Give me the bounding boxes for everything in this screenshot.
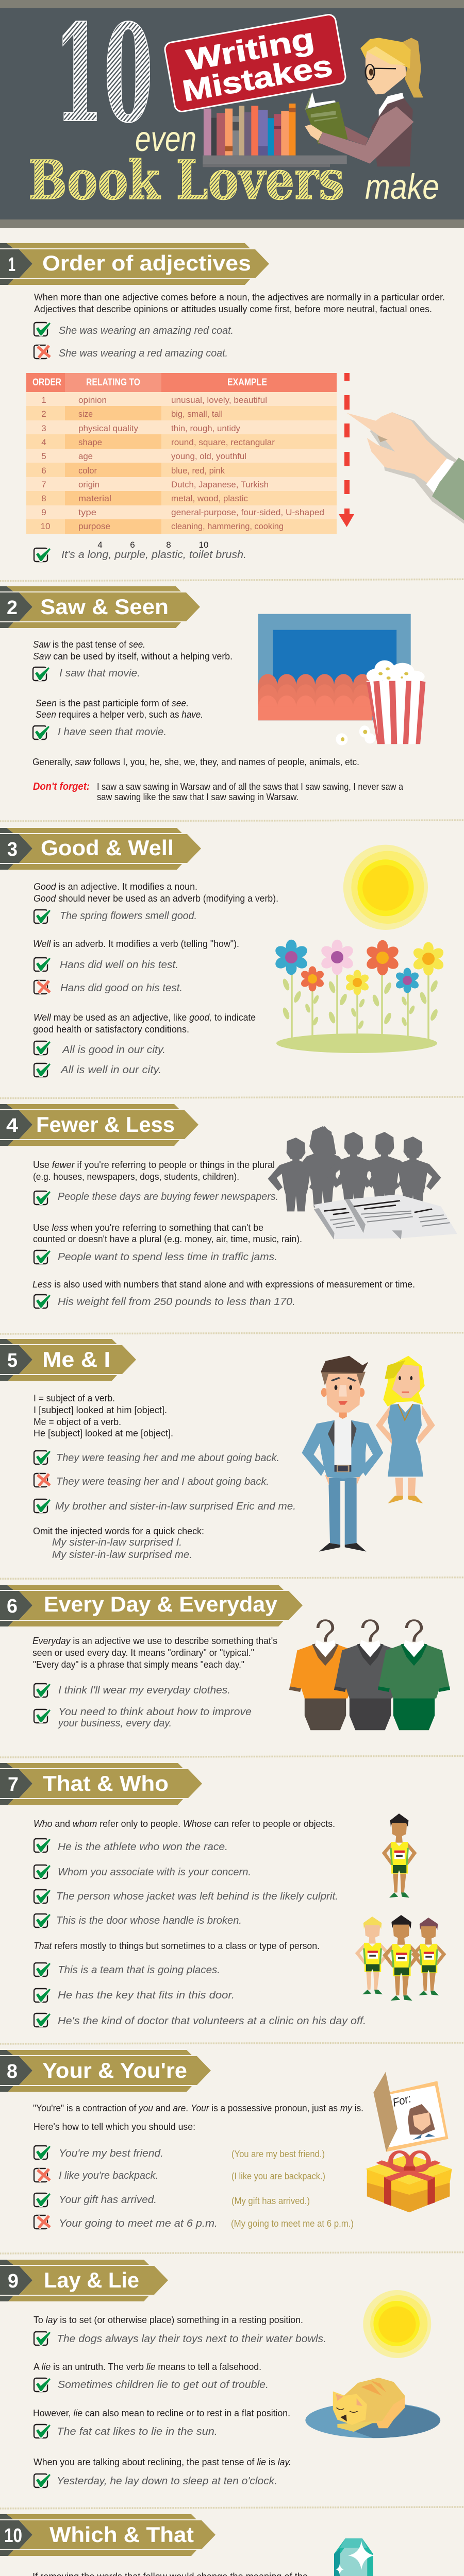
banner 10: Which & That [49, 2522, 194, 2547]
banner 5: 5 [7, 1350, 18, 1371]
text: less: Use less when you're referring to something that can't be [33, 1223, 263, 1233]
correct example [34, 1249, 277, 1264]
incorrect example [34, 2168, 325, 2182]
banner 6 [0, 1585, 303, 1626]
adjective order table: 6 [41, 466, 46, 476]
text: lie: A lie is an untruth. The verb lie means to tell a falsehood. [34, 2362, 261, 2372]
correct example [34, 1889, 338, 1904]
correct example [34, 1190, 278, 1205]
correct example [34, 1706, 252, 1729]
correct example: I think I'll wear my everyday clothes. [58, 1685, 230, 1696]
correct example: My brother and sister-in-law surprised Eric and me. [55, 1501, 296, 1512]
illustration: athlete team [355, 1915, 446, 2001]
correct example: (You are my best friend.) [231, 2149, 325, 2159]
illustration: jackets on hangers [289, 1620, 450, 1730]
illustration: sleeping cat [305, 2378, 440, 2438]
correct example: You need to think about how to improve [58, 1706, 252, 1718]
adjective order table: general-purpose, four-sided, U-shaped [171, 507, 324, 517]
text: well as adjective: good health or satisfactory conditions. [33, 1024, 189, 1035]
red sign: Writing Mistakes [164, 13, 346, 113]
text: lie recline: However, lie can also mean to recline or to rest in a flat position. [33, 2408, 290, 2418]
correct example: All is well in our city. [60, 1064, 161, 1076]
illustration: gift tag: For: [391, 2092, 412, 2109]
order numbers above example: 8 [166, 540, 171, 550]
banner 1 [0, 243, 269, 285]
adjective order table: round, square, rectangular [171, 437, 275, 447]
banner 9: 9 [8, 2270, 19, 2292]
text: past tense: When you are talking about reclining, the past tense of lie is lay. [34, 2457, 291, 2467]
header panel [0, 0, 464, 228]
correct example [34, 1962, 220, 1977]
correct example: He is the athlete who won the race. [58, 1841, 228, 1853]
banner 4: Fewer & Less [36, 1112, 175, 1137]
correct example [34, 2192, 310, 2207]
text: generally: Generally, saw follows I, you, he, she, we, they, and names of people, animals, etc. [32, 757, 359, 767]
correct example: The person whose jacket was left behind is the likely culprit. [56, 1891, 338, 1902]
text: quick check: My sister-in-law surprised I. [52, 1537, 182, 1548]
intro text [34, 292, 445, 314]
adjective order table: 9 [41, 507, 46, 517]
adjective order table: 10 [41, 521, 50, 531]
illustration: gift tag [373, 2072, 449, 2152]
banner 3: 3 [7, 839, 18, 860]
incorrect example: Your going to meet me at 6 p.m. [59, 2218, 218, 2229]
text: fewer [33, 1160, 275, 1182]
illustration: man and woman [302, 1356, 435, 1552]
banner 7: That & Who [43, 1771, 169, 1795]
correct example [34, 2331, 326, 2346]
adjective order table: opinion [78, 395, 107, 405]
banner 7: 7 [8, 1774, 19, 1795]
banner 5 [0, 1339, 136, 1381]
text: me and I: I = subject of a verb. [34, 1393, 115, 1403]
adjective order table [26, 373, 337, 534]
banner 2 [0, 586, 200, 628]
incorrect example: Hans did good on his test. [60, 982, 183, 994]
correct example [34, 2012, 366, 2027]
text: who: Who and whom refer only to people. Whose can refer to people or objects. [34, 1819, 335, 1829]
correct example: It's a long, purple, plastic, toilet brush. [61, 549, 246, 561]
text: saw: Saw can be used by itself, without a helping verb. [33, 651, 233, 662]
text: well: Well is an adverb. It modifies a verb (telling "how"). [33, 939, 239, 949]
text: me and I: I [subject] looked at him [object]. [34, 1405, 167, 1415]
correct example [34, 1294, 295, 1309]
correct example: The spring flowers smell good. [60, 910, 197, 922]
text: you're [33, 2103, 363, 2132]
banner 2: 2 [7, 597, 18, 619]
text: saw [33, 639, 233, 662]
correct example: He's the kind of doctor that volunteers at a clinic on his day off. [58, 2015, 366, 2027]
adjective order table: EXAMPLE [227, 377, 267, 388]
correct example [34, 1062, 161, 1077]
correct example: The fat cat likes to lie in the sun. [57, 2426, 218, 2437]
correct example [34, 1450, 279, 1465]
adjective order table: metal, wood, plastic [171, 494, 248, 503]
correct example: Yesterday, he lay down to sleep at ten o'clock. [57, 2476, 277, 2487]
illustration: people silhouettes [268, 1126, 441, 1211]
text: you're: Here's how to tell which you should use: [34, 2122, 195, 2132]
banner 8: 8 [7, 2061, 18, 2082]
text: everyday: Everyday is an adjective we use to describe something that's [32, 1636, 277, 1646]
incorrect example [34, 980, 183, 994]
banner 6: 6 [7, 1596, 18, 1617]
text: good [34, 882, 278, 904]
correct example [34, 1498, 296, 1513]
text: everyday [32, 1636, 277, 1670]
text: quick check [33, 1526, 204, 1561]
text: well as adjective [33, 1012, 256, 1035]
text: everyday: "Every day" is a phrase that simply means "each day." [33, 1659, 244, 1670]
text: lay: To lay is to set (or otherwise place) something in a resting position. [34, 2315, 303, 2325]
correct example [34, 909, 197, 924]
banner 10: 10 [4, 2525, 22, 2547]
correct example: He has the key that fits in this door. [58, 1990, 235, 2001]
adjective order table: type [78, 507, 96, 517]
title words: Book Lovers: Book Lovers [28, 148, 344, 212]
banner 1: 1 [8, 254, 15, 276]
section 5: Me & I [0, 1339, 435, 1561]
correct example [34, 1913, 242, 1928]
correct example [34, 1040, 165, 1056]
intro text: When more than one adjective comes before a noun, the adjectives are normally in a particular order. [34, 292, 445, 302]
correct example: Sometimes children lie to get out of trouble. [58, 2379, 269, 2391]
correct example: Your gift has arrived. [59, 2194, 157, 2206]
don't forget callout: I saw a saw sawing in Warsaw and of all the saws that I saw sawing, I never saw a [97, 782, 404, 792]
order numbers above example: 10 [199, 540, 208, 550]
section 4: Fewer & Less [0, 1104, 457, 1309]
adjective order table: blue, red, pink [171, 466, 225, 476]
correct example [34, 2473, 277, 2488]
don't forget callout: saw sawing like the saw that I saw sawing in Warsaw. [97, 792, 299, 802]
adjective order table: shape [78, 437, 102, 447]
correct example [34, 1683, 230, 1698]
correct example: This is the door whose handle is broken. [56, 1915, 242, 1926]
section 1: Order of adjectives [0, 243, 464, 562]
banner 8 [0, 2050, 211, 2092]
adjective order table: age [78, 451, 93, 461]
adjective order table: purpose [78, 521, 110, 531]
incorrect example: She was wearing a red amazing coat. [59, 348, 228, 359]
adjective order table: Dutch, Japanese, Turkish [171, 480, 269, 489]
adjective order table: size [78, 409, 93, 419]
order numbers above example: 4 [97, 540, 103, 550]
correct example [34, 321, 234, 336]
correct example [34, 2424, 218, 2438]
section 6: Every Day & Everyday [0, 1585, 450, 1730]
section 2: Saw & Seen [0, 586, 425, 802]
adjective order table: RELATING TO [86, 377, 140, 388]
intro text: Adjectives that describe opinions or attitudes usually come first, before more neutral, factual ones. [34, 304, 432, 314]
banner 4 [0, 1104, 198, 1146]
banner 4: 4 [6, 1115, 18, 1137]
text: me and I: He [subject] looked at me [object]. [34, 1428, 173, 1438]
illustration: sun [343, 845, 428, 930]
correct example [33, 666, 140, 681]
illustration: single athlete [382, 1814, 417, 1897]
incorrect example: (I like you are backpack.) [231, 2171, 325, 2181]
adjective order table: unusual, lovely, beautiful [171, 395, 267, 405]
text: well as adjective: Well may be used as an adjective, like good, to indicate [34, 1012, 256, 1023]
banner 5: Me & I [42, 1347, 110, 1371]
text: fewer: Use fewer if you're referring to people or things in the plural [33, 1160, 275, 1170]
text: quick check: My sister-in-law surprised me. [52, 1549, 192, 1561]
don't forget callout [33, 781, 404, 802]
correct example: His weight fell from 250 pounds to less than 170. [58, 1296, 295, 1308]
title word: make: make [365, 167, 439, 207]
text: seen: Seen requires a helper verb, such as have. [36, 709, 203, 720]
adjective order table: cleaning, hammering, cooking [171, 521, 284, 531]
correct example [33, 725, 167, 740]
adjective order table: thin, rough, untidy [171, 423, 240, 433]
correct example: This is a team that is going places. [58, 1964, 220, 1976]
correct example [34, 2377, 269, 2392]
text: me and I [34, 1393, 173, 1438]
text: seen [36, 698, 203, 720]
illustration: pointing hand [347, 412, 464, 524]
correct example [34, 1864, 251, 1879]
section 9: Lay & Lie [0, 2260, 440, 2488]
section 3: Good & Well [0, 828, 445, 1077]
banner 10 [0, 2514, 216, 2556]
text: good: Good is an adjective. It modifies a noun. [34, 882, 197, 892]
banner 2: Saw & Seen [40, 595, 169, 619]
correct example [34, 1838, 228, 1853]
text: seen: Seen is the past participle form of see. [36, 698, 189, 708]
red dashed arrow [339, 373, 354, 527]
text: less [33, 1223, 302, 1244]
big number 10: 10 [54, 0, 153, 152]
title word: even: even [135, 119, 196, 159]
don't forget callout: Don't forget: [33, 781, 90, 792]
correct example: All is good in our city. [62, 1044, 165, 1056]
correct example [34, 957, 178, 972]
red sign: Writing Mistakes: Mistakes [180, 49, 335, 108]
text: quick check: Omit the injected words for a quick check: [33, 1526, 204, 1536]
adjective order table: origin [78, 480, 100, 489]
adjective order table: physical quality [78, 423, 139, 433]
correct example: People want to spend less time in traffic jams. [58, 1251, 277, 1263]
adjective order table: 2 [41, 409, 46, 419]
banner 3: Good & Well [41, 836, 174, 860]
text: good: Good should never be used as an adverb (modifying a verb). [34, 893, 278, 904]
correct example: They were teasing her and me about going back. [56, 1452, 279, 1464]
adjective order table: big, small, tall [171, 409, 223, 419]
incorrect example: (My going to meet me at 6 p.m.) [231, 2218, 354, 2229]
banner 3 [0, 828, 201, 870]
illustration: woman reading [305, 38, 423, 166]
banner 7 [0, 1763, 202, 1805]
illustration: sun [363, 2290, 431, 2358]
incorrect example [34, 2215, 354, 2229]
correct example: Whom you associate with is your concern. [58, 1867, 251, 1878]
correct example: I have seen that movie. [58, 726, 167, 738]
correct example [34, 1988, 235, 2003]
text: me and I: Me = object of a verb. [34, 1417, 121, 1427]
banner 9 [0, 2260, 168, 2301]
banner 6: Every Day & Everyday [44, 1592, 278, 1616]
adjective order table: 7 [41, 480, 46, 489]
red sign: Writing Mistakes: Writing [184, 22, 317, 77]
adjective order table: young, old, youthful [171, 451, 246, 461]
order numbers above example: 6 [130, 540, 135, 550]
illustration: newspapers [313, 1194, 457, 1240]
text: everyday: seen or used every day. It means "ordinary" or "typical." [32, 1648, 254, 1658]
correct example: I saw that movie. [59, 668, 140, 679]
correct example: You're my best friend. [59, 2148, 163, 2159]
adjective order table: color [78, 466, 97, 476]
adjective order table: 5 [41, 451, 46, 461]
adjective order table: 3 [41, 423, 46, 433]
adjective order table: 4 [41, 437, 46, 447]
text: less with numbers: Less is also used with numbers that stand alone and with expressions of measurement or time. [32, 1279, 415, 1290]
correct example: People these days are buying fewer newspapers. [58, 1191, 278, 1202]
text: less: counted or doesn't have a plural (e.g. money, air, time, music, rain). [33, 1234, 302, 1244]
adjective order table: 8 [41, 494, 46, 503]
correct example [34, 547, 246, 562]
adjective order table: material [78, 494, 111, 503]
text: you're: "You're" is a contraction of you and are. Your is a possessive pronoun, just as my is. [33, 2103, 363, 2113]
correct example: (My gift has arrived.) [231, 2196, 310, 2206]
banner 8: Your & You're [42, 2058, 187, 2082]
text: saw: Saw is the past tense of see. [33, 639, 145, 650]
banner 1: Order of adjectives [42, 251, 251, 275]
section 8: Your & You're [0, 2050, 452, 2229]
correct example: She was wearing an amazing red coat. [59, 325, 234, 336]
text: fewer: (e.g. houses, newspapers, dogs, students, children). [33, 1172, 239, 1182]
correct example: The dogs always lay their toys next to their water bowls. [57, 2333, 326, 2345]
correct example [34, 2145, 325, 2160]
illustration: gift box [366, 2152, 452, 2212]
adjective order table: 1 [41, 395, 46, 405]
illustration: bookshelf [203, 104, 347, 167]
banner 9: Lay & Lie [44, 2268, 139, 2292]
section 7: That & Who [0, 1763, 446, 2027]
correct example: Hans did well on his test. [60, 959, 178, 971]
illustration: cinema and popcorn [258, 614, 425, 745]
text: that: That refers mostly to things but sometimes to a class or type of person. [34, 1941, 320, 1951]
correct example: your business, every day. [57, 1718, 172, 1729]
order numbers above example [97, 540, 208, 550]
incorrect example: They were teasing her and I about going back. [56, 1476, 269, 1487]
section 10: Which & That [0, 2514, 442, 2576]
illustration: teal gem [334, 2538, 375, 2576]
illustration: flowers [273, 940, 445, 1053]
adjective order table: ORDER [32, 377, 61, 388]
incorrect example: I like you're backpack. [59, 2170, 158, 2181]
